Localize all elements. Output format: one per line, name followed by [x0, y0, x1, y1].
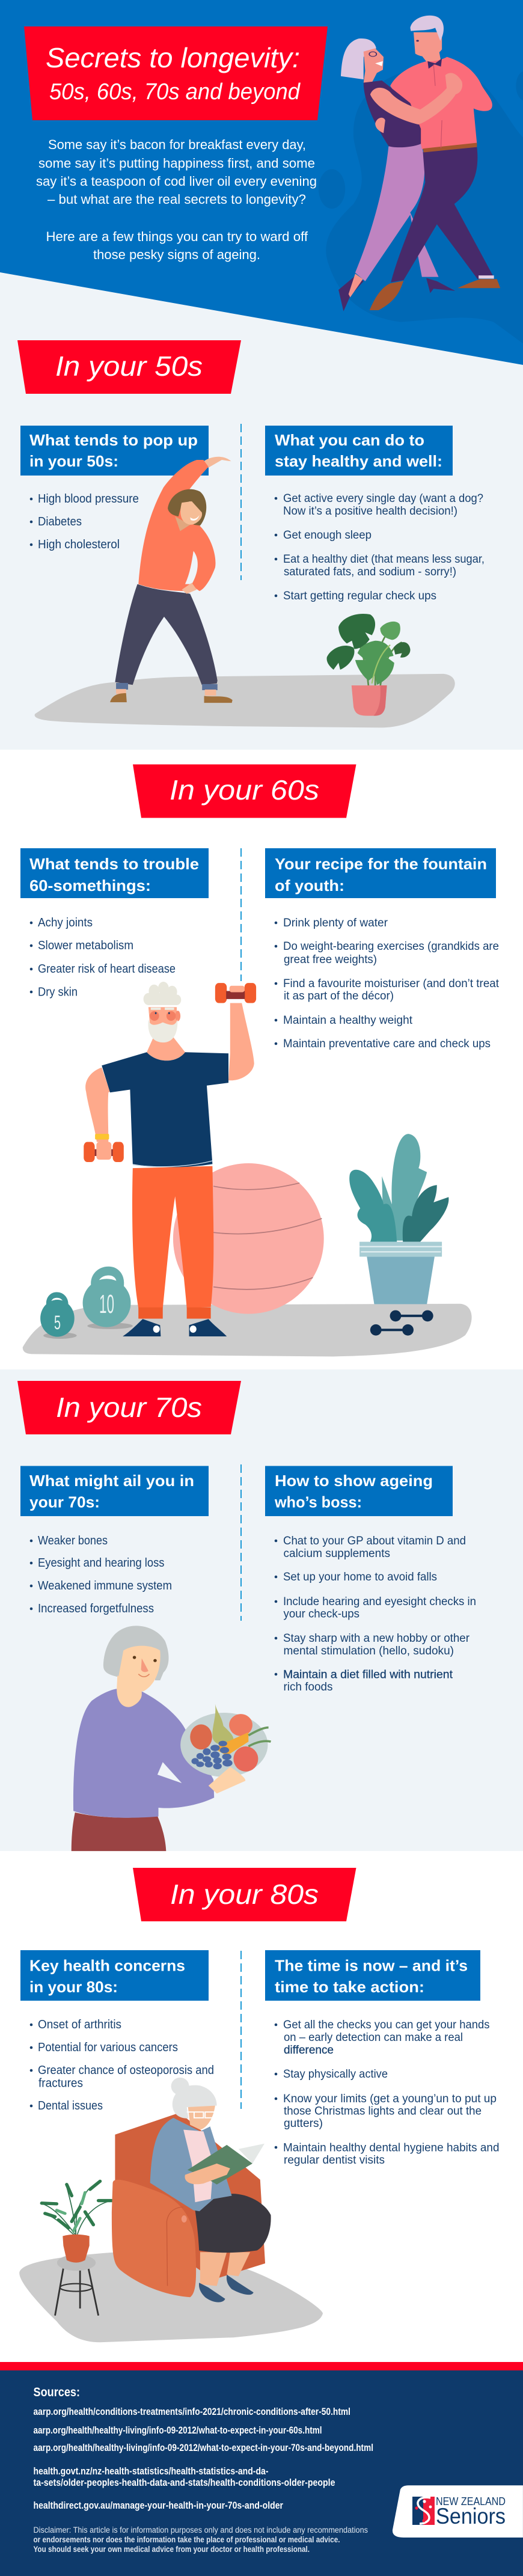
list: take action 80s: Get all the checks you can get your hands [283, 2019, 489, 2031]
list: troubles 60s [30, 916, 176, 999]
list: ailments 70s [30, 1534, 172, 1615]
disclaimer: You should seek your own medical advice from your doctor or health professional. [34, 2545, 310, 2554]
left heading box 80s [20, 1950, 209, 2001]
list: take action 80s: gutters) [284, 2117, 323, 2130]
right heading box 70s [265, 1466, 453, 1516]
sources list: health.govt.nz/nz-health-statistics/health-statistics-and-da- [34, 2465, 268, 2477]
list: key concerns 80s: Greater chance of osteoporosis and [38, 2064, 214, 2077]
section background: 70s [0, 1369, 523, 1851]
illustration: monstera plant [327, 614, 410, 716]
section background: 80s [0, 1851, 523, 2362]
list: what you can do 50s: Now it’s a positive health decision!) [283, 505, 457, 518]
list: take action 80s: on – early detection can make a real [284, 2031, 463, 2044]
sources list: healthdirect.gov.au/manage-your-health-in-your-70s-and-older [34, 2500, 283, 2511]
list: ailments 70s: Weaker bones [38, 1534, 108, 1547]
sources list: aarp.org/health/healthy-living/info-09-2012/what-to-expect-in-your-60s.html [34, 2425, 322, 2436]
list: recipe 60s: it as part of the décor) [284, 990, 394, 1003]
intro text: say it’s a teaspoon of cod liver oil every evening [36, 174, 317, 189]
heading: In your 80s: In your 80s [170, 1879, 319, 1910]
heading: In your 60s: In your 60s [170, 774, 319, 806]
list: take action 80s: Know your limits (get a young’un to put up [283, 2093, 497, 2105]
icon: small dumbbells [370, 1310, 433, 1336]
list: what pops up in 50s [30, 492, 139, 551]
list: how to show ageing who's boss [275, 1535, 476, 1693]
list: ailments 70s: Increased forgetfulness [38, 1602, 154, 1615]
icon: 5 kettlebell: 5 [54, 1312, 61, 1333]
right heading box 80s: The time is now – and it’s [275, 1956, 468, 1974]
sources list [34, 2406, 373, 2511]
right heading box 60s [265, 848, 496, 898]
illustration: potted plant [349, 1134, 448, 1304]
list: recipe 60s: Maintain a healthy weight [283, 1014, 413, 1027]
heading: In your 70s [17, 1381, 241, 1434]
right heading box 70s: How to show ageing [275, 1472, 433, 1490]
heading: In your 60s [133, 765, 356, 818]
list: how to show ageing who's boss: calcium supplements [284, 1547, 390, 1560]
list: troubles 60s: Dry skin [38, 986, 78, 999]
icon: plate of fruit and vegetables [180, 1704, 271, 1793]
title banner: 50s, 60s, 70s and beyond [49, 79, 301, 105]
left heading box 80s: Key health concerns [29, 1956, 185, 1974]
list: key concerns 80s: Dental issues [38, 2099, 103, 2113]
disclaimer [34, 2526, 368, 2554]
logo panel: Seniors [436, 2504, 506, 2529]
list: what pops up in 50s: Diabetes [38, 515, 82, 528]
floor 80s [19, 2252, 323, 2342]
list: recipe 60s [275, 917, 500, 1050]
logo panel: NEW ZEALAND [436, 2495, 506, 2507]
list: how to show ageing who's boss: Include hearing and eyesight checks in [283, 1595, 476, 1608]
list: what you can do 50s: Eat a healthy diet (that means less sugar, [283, 553, 485, 566]
list: take action 80s: Maintain healthy dental hygiene habits and [283, 2141, 499, 2155]
intro text: some say it’s putting happiness first, and some [38, 156, 315, 171]
list: key concerns 80s [30, 2018, 214, 2113]
list: recipe 60s: Drink plenty of water [283, 917, 388, 929]
right heading box 80s: time to take action: [275, 1978, 424, 1996]
divider 60s [240, 848, 242, 981]
list: take action 80s: those Christmas lights and clear out the [284, 2105, 482, 2117]
illustration: stool with plant [41, 2181, 112, 2316]
list: what pops up in 50s: High blood pressure [38, 492, 139, 506]
sources list: aarp.org/health/healthy-living/info-09-2012/what-to-expect-in-your-70s-and-beyond.html [34, 2442, 373, 2453]
divider 80s [240, 1951, 242, 2109]
left heading box 80s: in your 80s: [29, 1978, 118, 1996]
right heading box 70s: who’s boss: [274, 1493, 362, 1511]
list: recipe 60s: great free weights) [284, 953, 377, 966]
list: take action 80s [275, 2019, 499, 2167]
list: how to show ageing who's boss: your check-ups [284, 1608, 359, 1621]
heading: In your 50s [17, 340, 241, 394]
left heading box 50s: in your 50s: [29, 452, 118, 470]
left heading box 50s: What tends to pop up [29, 431, 198, 449]
list: recipe 60s: Find a favourite moisturiser (and don’t treat [283, 977, 500, 990]
panel: in your 60s [20, 765, 500, 1356]
icon: 5 kettlebell [40, 1295, 77, 1339]
list: troubles 60s: Achy joints [38, 916, 93, 929]
title banner [24, 26, 328, 120]
floor 50s [35, 674, 455, 727]
list: what you can do 50s: Start getting regular check ups [283, 590, 436, 602]
panel: in your 80s [19, 1868, 499, 2342]
left heading box 70s: What might ail you in [29, 1472, 194, 1490]
list: what you can do 50s: saturated fats, and sodium - sorry!) [284, 566, 456, 578]
right heading box 60s: Your recipe for the fountain [275, 855, 487, 873]
list: recipe 60s: Do weight-bearing exercises (grandkids are [283, 940, 499, 953]
divider 50s [240, 424, 242, 580]
panel: in your 50s [17, 340, 485, 727]
heading: In your 70s: In your 70s [56, 1392, 202, 1423]
disclaimer: or endorsements nor does the information take the place of professional or medical advice. [34, 2535, 340, 2544]
list: how to show ageing who's boss: rich foods [284, 1681, 333, 1693]
list: take action 80s: regular dentist visits [284, 2154, 385, 2167]
list: ailments 70s: Eyesight and hearing loss [38, 1556, 165, 1570]
list: how to show ageing who's boss: Set up your home to avoid falls [283, 1571, 437, 1583]
hero background blobs [319, 71, 523, 343]
intro text: those pesky signs of ageing. [93, 247, 260, 262]
panel: in your 70s [17, 1381, 476, 1851]
right heading box 80s [265, 1950, 480, 2001]
left heading box 60s: 60-somethings: [29, 877, 151, 895]
section background: 60s [0, 750, 523, 1369]
left heading box 70s: your 70s: [29, 1493, 100, 1511]
list: key concerns 80s: Potential for various cancers [38, 2041, 178, 2054]
intro text: Some say it’s bacon for breakfast every day, [48, 137, 306, 152]
disclaimer: Disclaimer: This article is for information purposes only and does not include any recommendations [34, 2526, 368, 2535]
illustration: woman with plate of food [72, 1626, 214, 1851]
icon: 10 kettlebell: 10 [99, 1290, 114, 1319]
illustration: exercise ball [173, 1163, 324, 1314]
heading: In your 80s [133, 1868, 356, 1921]
list: how to show ageing who's boss: Maintain a diet filled with nutrient [283, 1669, 453, 1681]
intro text: Here are a few things you can try to ward off [46, 229, 308, 244]
list: key concerns 80s: Onset of arthritis [38, 2018, 121, 2031]
intro text [36, 137, 317, 262]
logo icon [412, 2497, 435, 2525]
left heading box 50s [20, 426, 209, 476]
sources list: aarp.org/health/conditions-treatments/info-2021/chronic-conditions-after-50.html [34, 2406, 350, 2417]
illustration: dancing couple [338, 16, 500, 311]
icon: 10 kettlebell [83, 1271, 133, 1329]
floor 60s [23, 1304, 472, 1356]
red footer stripe [0, 2362, 523, 2370]
list: key concerns 80s: fractures [38, 2076, 83, 2090]
list: how to show ageing who's boss: Chat to your GP about vitamin D and [283, 1535, 466, 1547]
left heading box 70s [20, 1466, 209, 1516]
heading: In your 50s: In your 50s [55, 350, 203, 382]
intro text: – but what are the real secrets to longevity? [47, 192, 306, 207]
panel: hero [0, 0, 523, 365]
right heading box 60s: of youth: [275, 877, 344, 895]
list: take action 80s: difference [284, 2044, 334, 2057]
footer background [0, 2370, 523, 2576]
logo panel [393, 2485, 523, 2538]
list: how to show ageing who's boss: mental stimulation (hello, sudoku) [284, 1645, 454, 1657]
left heading box 60s: What tends to trouble [29, 855, 199, 873]
illustration: woman reading in armchair [112, 2078, 271, 2302]
illustration: man with dumbbells [84, 982, 256, 1336]
list: recipe 60s: Maintain preventative care and check ups [283, 1038, 491, 1050]
hero blue background [0, 0, 523, 365]
list: how to show ageing who's boss: Stay sharp with a new hobby or other [283, 1632, 470, 1645]
right heading box 50s: What you can do to [275, 431, 424, 449]
divider 70s [240, 1464, 242, 1621]
list: troubles 60s: Greater risk of heart disease [38, 962, 176, 976]
right heading box 50s [265, 426, 453, 476]
list: ailments 70s: Weakened immune system [38, 1579, 172, 1592]
list: troubles 60s: Slower metabolism [38, 939, 133, 952]
sources heading: Sources: [34, 2385, 80, 2399]
list: what you can do 50s: Get active every single day (want a dog? [283, 492, 483, 505]
panel: footer [0, 2370, 523, 2576]
title banner: Secrets to longevity: [46, 42, 300, 73]
illustration: woman stretching [110, 457, 233, 703]
list: what you can do 50s: Get enough sleep [283, 529, 372, 542]
page background [0, 0, 523, 750]
sources list: ta-sets/older-peoples-health-data-and-stats/health-conditions-older-people [34, 2477, 335, 2488]
list: what pops up in 50s: High cholesterol [38, 538, 120, 551]
left heading box 60s [20, 848, 209, 898]
list: what you can do 50s [275, 492, 485, 602]
right heading box 50s: stay healthy and well: [275, 452, 442, 470]
list: take action 80s: Stay physically active [283, 2068, 388, 2081]
